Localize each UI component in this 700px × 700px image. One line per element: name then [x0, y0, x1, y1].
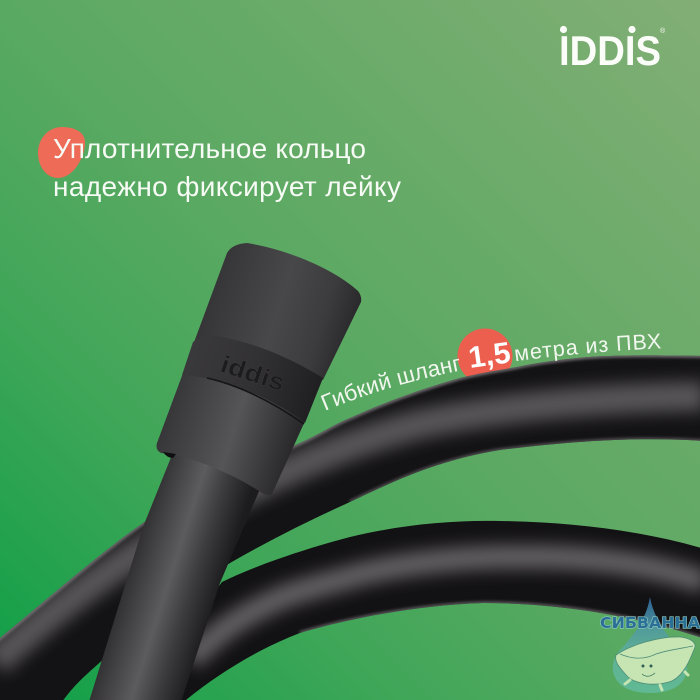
curved caption: length value: 1,5 [466, 336, 513, 375]
heading text: надежно фиксирует лейку [53, 171, 401, 202]
hose: lower coil [182, 520, 700, 700]
water drop [613, 597, 687, 693]
watermark: Sibvanna [600, 597, 700, 693]
curved caption: hose: Гибкий шланг [320, 358, 459, 410]
handle top cap [193, 243, 361, 380]
logo i dots [560, 26, 636, 33]
red accent circle behind number [458, 328, 512, 384]
red accent blob behind heading [38, 127, 85, 178]
watermark name: СИБВАННА [600, 614, 700, 632]
shower hose handle fitting [88, 243, 361, 700]
embossed brand on ring: iddis [217, 351, 288, 397]
ring lower groove [207, 378, 304, 424]
registered mark: ® [660, 27, 666, 35]
lower collar [156, 365, 310, 495]
collar opening [163, 452, 176, 458]
curved caption: material: метра из ПВХ [515, 334, 661, 361]
heading text: Уплотнительное кольцо [53, 133, 366, 164]
handle tube [88, 440, 268, 700]
bathtub mascot [616, 637, 695, 690]
logo: IDDIS: IDDIS [559, 27, 661, 74]
sealing ring [182, 336, 323, 423]
hose: upper coil [0, 340, 700, 700]
